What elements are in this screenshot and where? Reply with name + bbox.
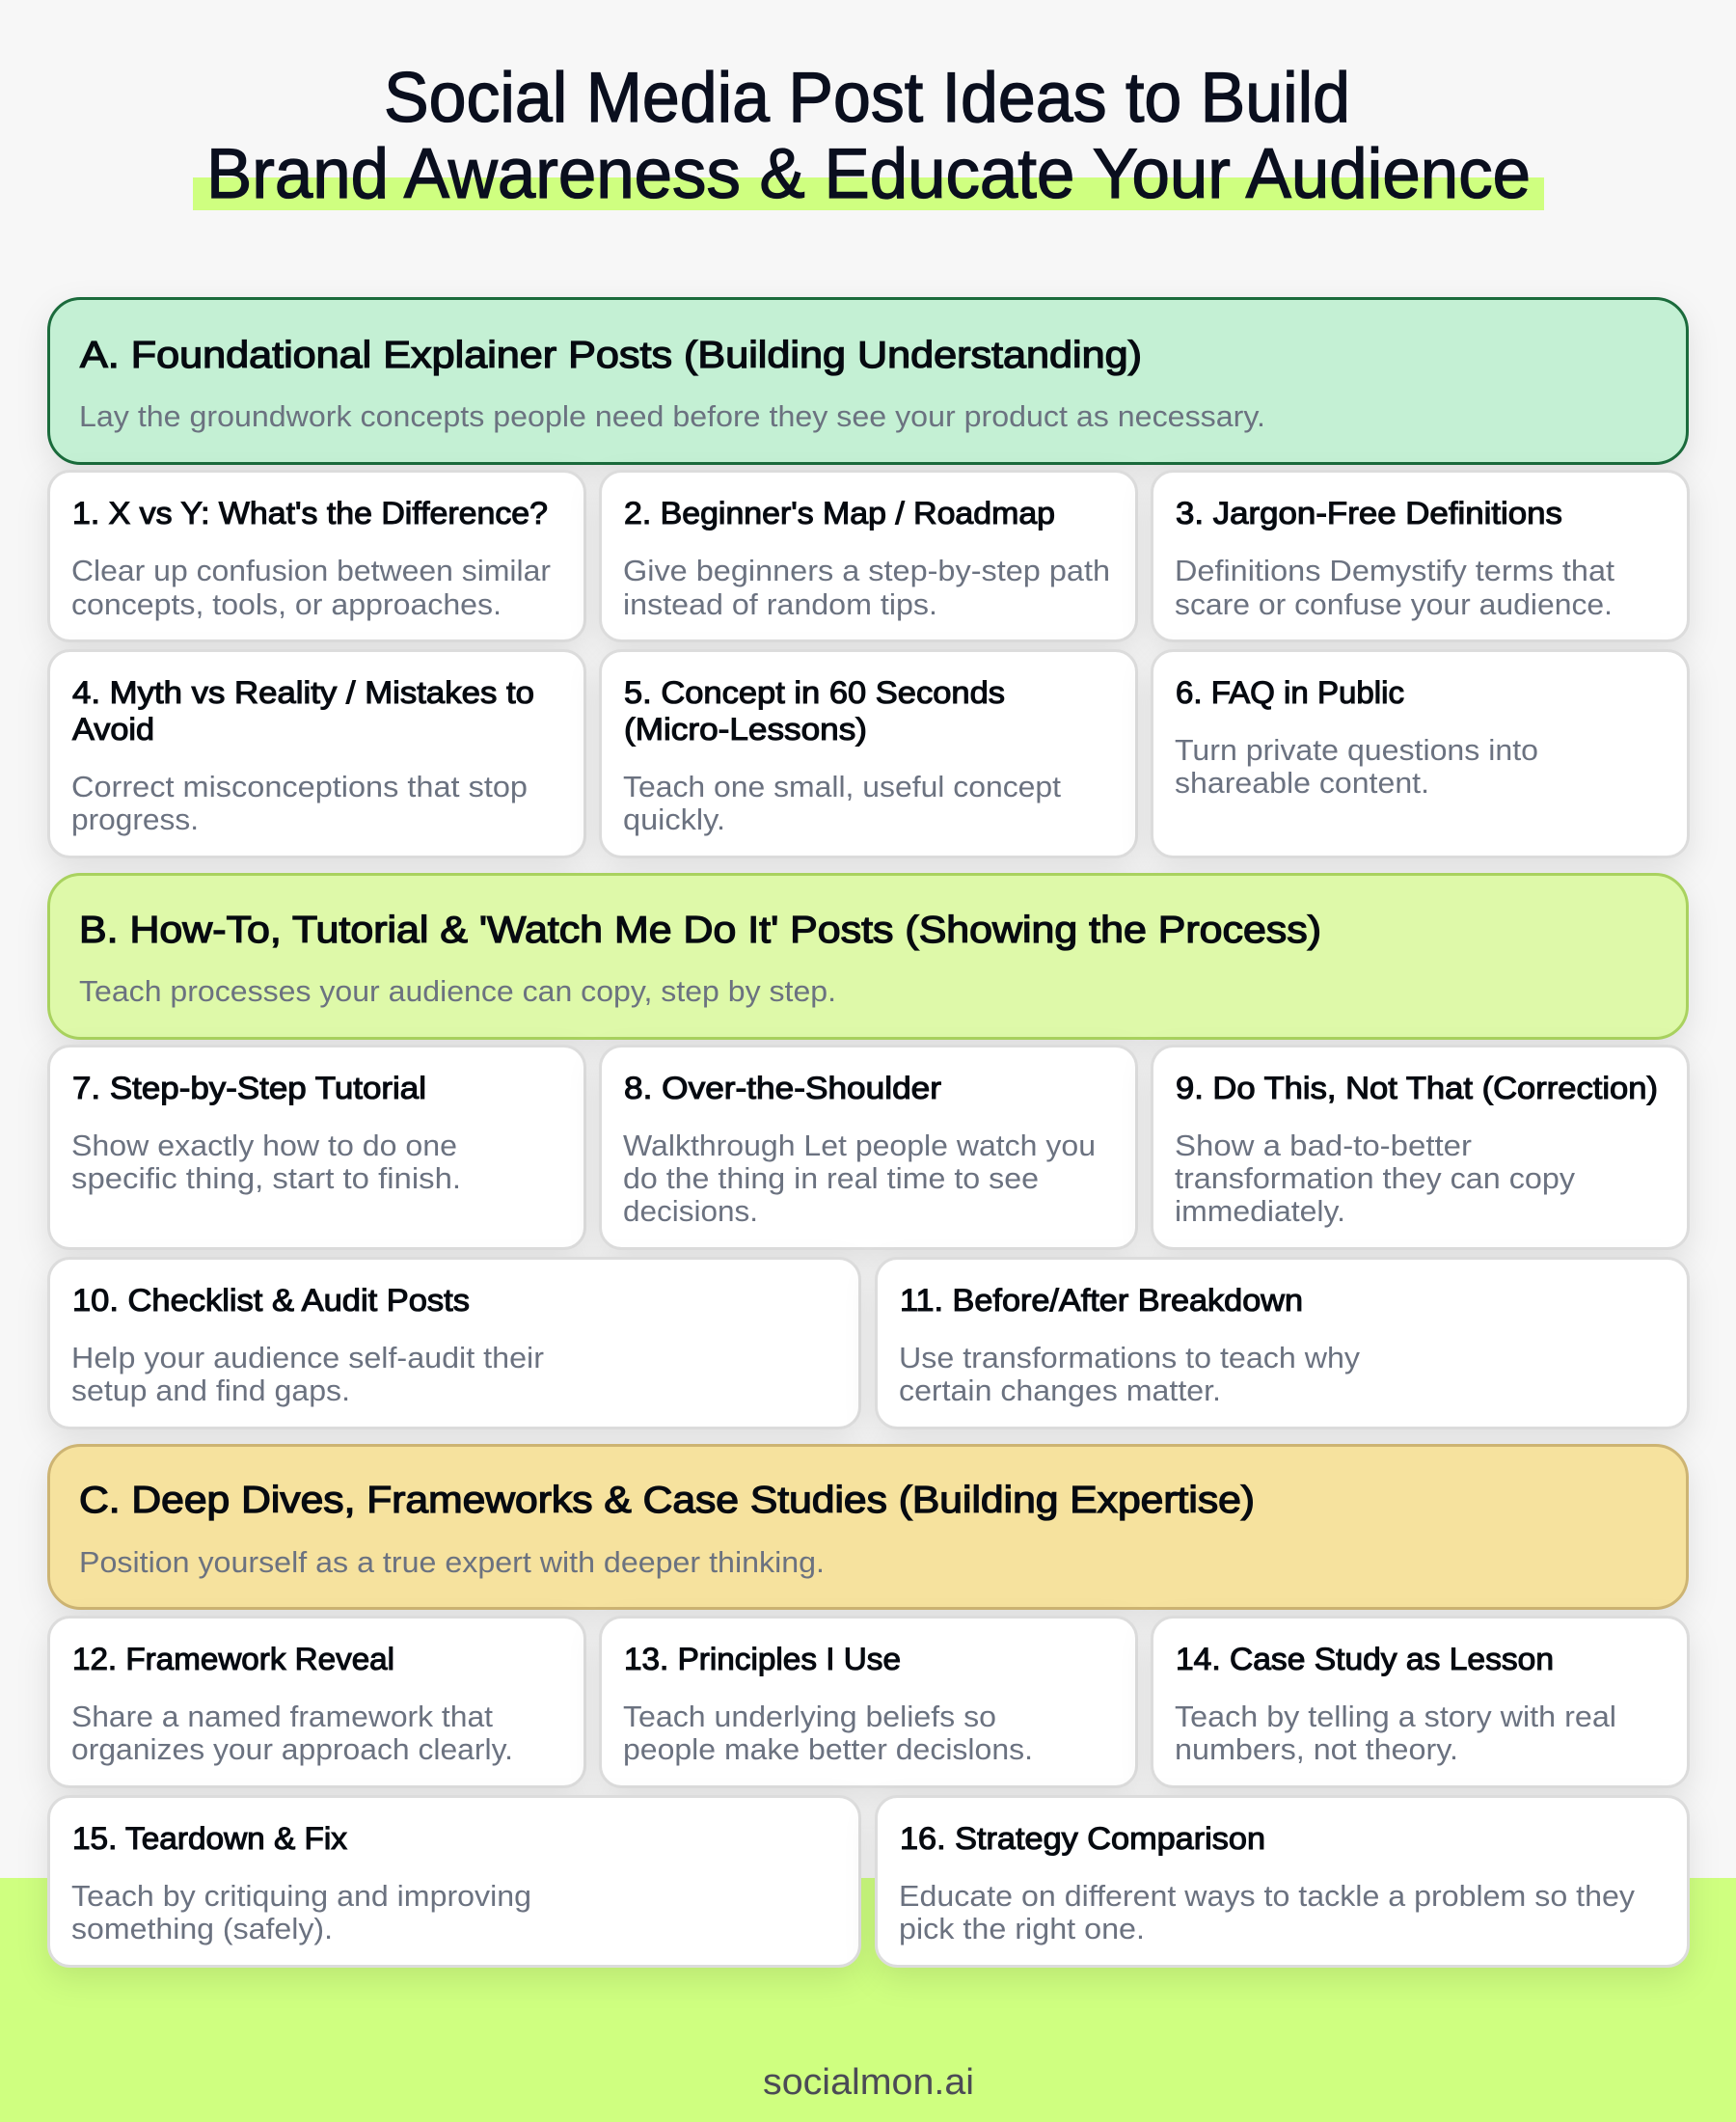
card 12 description: organizes your approach clearly. bbox=[71, 1733, 513, 1766]
card 1 description: concepts, tools, or approaches. bbox=[71, 588, 502, 621]
card 5 description: Teach one small, useful concept bbox=[623, 771, 1062, 803]
card 15 description: Teach by critiquing and improving bbox=[71, 1880, 531, 1913]
card 11 description: certain changes matter. bbox=[899, 1374, 1221, 1407]
card 14 description: Teach by telling a story with real bbox=[1175, 1700, 1616, 1733]
card 16 bbox=[876, 1796, 1688, 1966]
card 14 bbox=[1152, 1617, 1688, 1786]
card 3 title: 3. Jargon-Free Definitions bbox=[1176, 496, 1562, 530]
card 4 description bbox=[71, 771, 528, 836]
card 14 title: 14. Case Study as Lesson bbox=[1176, 1642, 1554, 1676]
card 2 title: 2. Beginner's Map / Roadmap bbox=[624, 496, 1055, 530]
card 8 description: do the thing in real time to see bbox=[623, 1162, 1039, 1195]
title bbox=[193, 59, 1544, 213]
card 3 description: scare or confuse your audience. bbox=[1175, 588, 1613, 621]
card 9 description: Show a bad-to-better bbox=[1175, 1129, 1472, 1162]
section A heading: A. Foundational Explainer Posts (Building Understanding) bbox=[80, 335, 1142, 376]
card 15 description: something (safely). bbox=[71, 1913, 333, 1945]
card 2 description: Give beginners a step-by-step path bbox=[623, 555, 1110, 587]
card 1 description: Clear up confusion between similar bbox=[71, 555, 551, 587]
card 13 bbox=[600, 1617, 1136, 1786]
card 13 description: people make better decislons. bbox=[623, 1733, 1033, 1766]
card 11 bbox=[876, 1258, 1688, 1428]
card 10 description bbox=[71, 1342, 544, 1407]
card 7 description bbox=[71, 1129, 461, 1195]
card 10 bbox=[48, 1258, 860, 1428]
card 4 description: Correct misconceptions that stop bbox=[71, 771, 528, 803]
card 3 description bbox=[1175, 555, 1615, 621]
card 3 bbox=[1152, 471, 1688, 640]
card 13 description bbox=[623, 1700, 1033, 1766]
section B subtitle: Teach processes your audience can copy, step by step. bbox=[79, 975, 836, 1008]
card 5 title: (Micro-Lessons) bbox=[624, 712, 867, 747]
card 9 description: transformation they can copy bbox=[1175, 1162, 1576, 1195]
card 1 description bbox=[71, 555, 551, 621]
card 12 description bbox=[71, 1700, 513, 1766]
section A header bbox=[48, 299, 1688, 463]
card 8 bbox=[600, 1046, 1136, 1248]
section B heading: B. How-To, Tutorial & 'Watch Me Do It' Posts (Showing the Process) bbox=[79, 910, 1321, 951]
card 12 title: 12. Framework Reveal bbox=[72, 1642, 394, 1676]
card 11 title: 11. Before/After Breakdown bbox=[900, 1283, 1303, 1318]
card 15 bbox=[48, 1796, 860, 1966]
card 4 bbox=[48, 650, 584, 857]
card 7 description: Show exactly how to do one bbox=[71, 1129, 457, 1162]
card 16 title: 16. Strategy Comparison bbox=[900, 1821, 1265, 1856]
card 14 description bbox=[1175, 1700, 1616, 1766]
card 12 bbox=[48, 1617, 584, 1786]
title highlight bbox=[193, 177, 1544, 210]
card 16 description: pick the right one. bbox=[899, 1913, 1145, 1945]
card 5 description: quickly. bbox=[623, 803, 725, 836]
card 12 description: Share a named framework that bbox=[71, 1700, 494, 1733]
card 7 title: 7. Step-by-Step Tutorial bbox=[72, 1071, 426, 1105]
card 10 title: 10. Checklist & Audit Posts bbox=[72, 1283, 470, 1318]
card 6 description: shareable content. bbox=[1175, 767, 1429, 800]
card 4 title bbox=[72, 675, 534, 747]
card 11 description bbox=[899, 1342, 1361, 1407]
card 3 description: Definitions Demystify terms that bbox=[1175, 555, 1615, 587]
card 4 title: Avoid bbox=[72, 712, 154, 747]
card 4 title: 4. Myth vs Reality / Mistakes to bbox=[72, 675, 534, 710]
card 9 description bbox=[1175, 1129, 1576, 1228]
card 6 description: Turn private questions into bbox=[1175, 734, 1538, 767]
card 8 title: 8. Over-the-Shoulder bbox=[624, 1071, 941, 1105]
card 6 title: 6. FAQ in Public bbox=[1176, 675, 1404, 710]
card 9 title: 9. Do This, Not That (Correction) bbox=[1176, 1071, 1658, 1105]
card 5 title bbox=[624, 675, 1005, 747]
footer band bbox=[0, 1878, 1736, 2122]
card 8 description: decisions. bbox=[623, 1195, 758, 1228]
card 6 description bbox=[1175, 734, 1538, 800]
card 13 description: Teach underlying beliefs so bbox=[623, 1700, 996, 1733]
card 2 description: instead of random tips. bbox=[623, 588, 937, 621]
section A subtitle: Lay the groundwork concepts people need before they see your product as necessary. bbox=[79, 400, 1265, 433]
card 1 bbox=[48, 471, 584, 640]
card 11 description: Use transformations to teach why bbox=[899, 1342, 1361, 1374]
card 14 description: numbers, not theory. bbox=[1175, 1733, 1458, 1766]
card 10 description: setup and find gaps. bbox=[71, 1374, 350, 1407]
card 5 title: 5. Concept in 60 Seconds bbox=[624, 675, 1005, 710]
card 8 description bbox=[623, 1129, 1096, 1228]
card 10 description: Help your audience self-audit their bbox=[71, 1342, 544, 1374]
card 9 bbox=[1152, 1046, 1688, 1248]
card 16 description: Educate on different ways to tackle a problem so they bbox=[899, 1880, 1636, 1913]
card 2 description bbox=[623, 555, 1110, 621]
footer brand: socialmon.ai bbox=[763, 2062, 974, 2103]
card 9 description: immediately. bbox=[1175, 1195, 1345, 1228]
section C header bbox=[48, 1445, 1688, 1609]
card 5 description bbox=[623, 771, 1062, 836]
card 7 description: specific thing, start to finish. bbox=[71, 1162, 461, 1195]
card 1 title: 1. X vs Y: What's the Difference? bbox=[72, 496, 548, 530]
card 4 description: progress. bbox=[71, 803, 199, 836]
card 15 description bbox=[71, 1880, 531, 1945]
card 2 bbox=[600, 471, 1136, 640]
title line 1: Social Media Post Ideas to Build bbox=[384, 59, 1350, 137]
section C heading: C. Deep Dives, Frameworks & Case Studies (Building Expertise) bbox=[79, 1480, 1255, 1521]
card 6 bbox=[1152, 650, 1688, 857]
card 7 bbox=[48, 1046, 584, 1248]
card 16 description bbox=[899, 1880, 1636, 1945]
section C subtitle: Position yourself as a true expert with deeper thinking. bbox=[79, 1546, 825, 1579]
title line 2: Brand Awareness & Educate Your Audience bbox=[206, 135, 1531, 213]
section B header bbox=[48, 874, 1688, 1038]
card 5 bbox=[600, 650, 1136, 857]
card 15 title: 15. Teardown & Fix bbox=[72, 1821, 347, 1856]
card 8 description: Walkthrough Let people watch you bbox=[623, 1129, 1096, 1162]
card 13 title: 13. Principles I Use bbox=[624, 1642, 901, 1676]
